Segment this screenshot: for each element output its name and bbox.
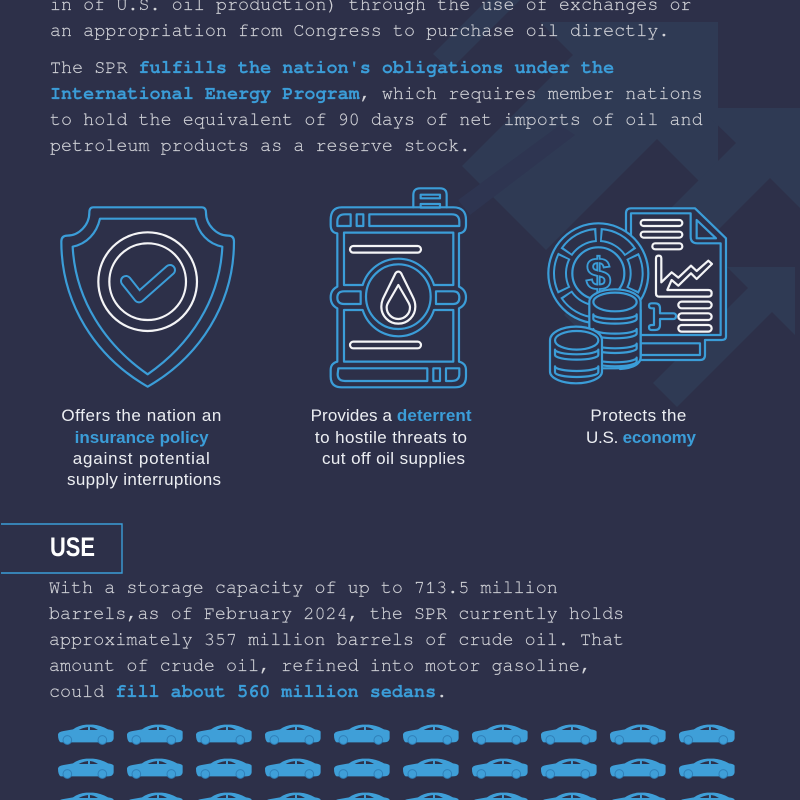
intro paragraph: an appropriation from Congress to purchase oil directly. xyxy=(50,21,670,40)
obligations paragraph: petroleum products as a reserve stock. xyxy=(50,136,470,155)
icon: financial report and coins: $ xyxy=(586,248,611,299)
obligations paragraph: to hold the equivalent of 90 days of net imports of oil and xyxy=(50,110,703,129)
obligations paragraph: The SPR fulfills the nation's obligations under the xyxy=(50,58,614,77)
pictogram: rows of sedans xyxy=(58,725,735,800)
use paragraph: barrels,as of February 2024, the SPR currently holds xyxy=(49,604,624,623)
caption: economy: U.S. economy xyxy=(586,428,696,447)
icon: oil barrel xyxy=(331,188,466,387)
caption: insurance policy: supply interruptions xyxy=(67,470,221,489)
background arrows xyxy=(433,0,800,407)
heading: USE: USE xyxy=(50,532,95,562)
caption: insurance policy: insurance policy xyxy=(75,428,209,447)
caption: economy: Protects the xyxy=(590,406,686,425)
caption: insurance policy: Offers the nation an xyxy=(61,406,221,425)
heading: USE xyxy=(1,524,122,573)
use paragraph: amount of crude oil, refined into motor gasoline, xyxy=(49,656,591,675)
icon: financial report and coins xyxy=(548,208,726,383)
obligations paragraph: International Energy Program, which requires member nations xyxy=(50,84,703,103)
use paragraph: approximately 357 million barrels of crude oil. That xyxy=(49,630,624,649)
caption: insurance policy: against potential xyxy=(73,449,210,468)
use paragraph: With a storage capacity of up to 713.5 million xyxy=(49,578,558,597)
icon: shield with check xyxy=(61,207,234,387)
use paragraph: could fill about 560 million sedans. xyxy=(49,682,447,701)
caption: deterrent: cut off oil supplies xyxy=(322,449,465,468)
caption: deterrent: Provides a deterrent xyxy=(311,406,472,425)
caption: deterrent: to hostile threats to xyxy=(315,428,467,447)
